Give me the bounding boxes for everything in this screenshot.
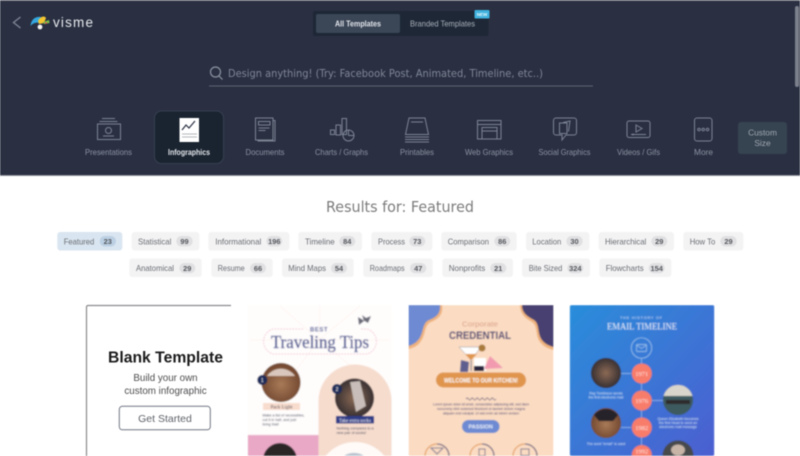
chip: flowcharts: 154 (651, 264, 664, 273)
chip: anatomical: 29 (183, 264, 191, 273)
caption 2 (657, 417, 699, 429)
card: corporate credential: Corporate (462, 320, 498, 328)
chip: how to: 29 (724, 237, 733, 246)
chip: featured (57, 232, 122, 250)
chip: process: Process (378, 236, 405, 246)
year 1976: 1976 (635, 398, 649, 405)
category: more: More (694, 147, 713, 157)
chip: hierarchical: 29 (655, 237, 663, 246)
filter chips row 1 (57, 232, 743, 250)
chip: informational: 196 (268, 237, 280, 246)
template tabs: Branded Templates (410, 18, 475, 28)
get started button: Get Started (138, 413, 192, 425)
caption 2: Queen Elizabeth becomes (657, 417, 699, 421)
logo: visme (30, 15, 93, 30)
chip: flowcharts (599, 258, 671, 277)
card: corporate credential: CREDENTIAL (449, 330, 511, 342)
category: web graphics (465, 120, 513, 157)
photo 4 (662, 440, 694, 456)
chip: nonprofits: 21 (494, 264, 502, 273)
new badge (474, 10, 490, 18)
tip 1 badge (257, 375, 267, 385)
chip: statistical: 99 (180, 237, 189, 246)
chip: resume: Resume (218, 263, 245, 273)
template tabs: All Templates (335, 18, 381, 28)
icon ring 2 (470, 444, 494, 456)
chip: mind maps: 54 (335, 264, 344, 273)
custom size button: Size (754, 138, 771, 148)
year 1982: 1982 (635, 425, 648, 432)
category: presentations: Presentations (85, 147, 132, 157)
card: blank template (86, 306, 231, 456)
caption 2: the first Head to send an (659, 421, 697, 425)
plane icon (358, 315, 371, 325)
chip: roadmaps (363, 258, 433, 277)
timeline axis (621, 358, 667, 456)
chip: timeline: 84 (343, 237, 352, 246)
chip: roadmaps: Roadmaps (370, 263, 405, 273)
card: email timeline: THE HISTORY OF (620, 316, 663, 320)
chip: bite sized (522, 258, 590, 277)
chip: anatomical: Anatomical (136, 263, 174, 273)
caption 2: electronic mail message (659, 425, 697, 429)
tip 2 photo highlight (350, 381, 366, 412)
card: traveling tips: Traveling Tips (271, 332, 369, 352)
chip: location (526, 232, 589, 250)
chip: resume (211, 258, 273, 277)
chip: mind maps (282, 258, 354, 277)
category: web graphics: Web Graphics (465, 147, 513, 157)
tip 2 label (336, 416, 374, 424)
chip: featured: Featured (64, 236, 95, 246)
chip: nonprofits (442, 258, 513, 277)
photo 3 (591, 408, 621, 438)
chip: hierarchical (599, 232, 674, 250)
chip: how to (683, 232, 743, 250)
chip: informational (208, 232, 289, 250)
category: social graphics: Social Graphics (538, 147, 590, 157)
logo: visme: visme (53, 15, 93, 30)
filter chips row 2 (129, 258, 671, 277)
chip: mind maps: Mind Maps (288, 263, 326, 273)
scrollbar (795, 6, 799, 87)
category: infographics selected (154, 111, 224, 164)
tip 1 label (263, 403, 300, 411)
tip 1 text: cut it in half, and just (262, 418, 296, 422)
chip: process (371, 232, 432, 250)
chip: resume: 66 (254, 264, 262, 273)
get started button (119, 406, 210, 430)
tip 3 photo (264, 443, 296, 456)
navy corner blob (520, 305, 554, 350)
category: videos and gifs: Videos / Gifs (617, 147, 660, 157)
year 1992 (632, 445, 652, 456)
passion pill: PASSION (469, 425, 493, 431)
category: videos and gifs (617, 121, 660, 157)
tip 1 text (262, 414, 305, 426)
tip 1 badge: 1 (261, 378, 264, 384)
chip: comparison: Comparison (448, 236, 489, 246)
caption 1 (589, 392, 624, 400)
back arrow (14, 17, 20, 28)
category: documents: Documents (246, 147, 284, 157)
welcome pill (436, 372, 526, 388)
dashed title frame (264, 329, 376, 354)
photo 1 (591, 358, 621, 388)
custom size button: Custom (748, 128, 777, 138)
header panel (0, 0, 800, 176)
year 1971 (632, 364, 652, 384)
passion pill (462, 420, 500, 433)
category: more (694, 118, 713, 157)
tip 1 label: Pack Light (271, 406, 293, 411)
body text: nonummy nibh euismod tincidunt ut laoreet dolore magna (437, 407, 526, 411)
card: email timeline: EMAIL TIMELINE (607, 322, 677, 332)
card: blank template: Build your own (133, 373, 198, 384)
tip 2 text (336, 426, 375, 435)
chip: bite sized: Bite Sized (529, 263, 563, 273)
card: corporate credential (408, 305, 554, 456)
card: blank template: Blank Template (108, 350, 223, 366)
tip 2 label: Take extra socks (339, 419, 371, 424)
search bar: Design anything! (Try: Facebook Post, Animated, Timeline, etc..) (228, 67, 543, 80)
chip: nonprofits: Nonprofits (449, 263, 485, 273)
icon ring 3 (513, 444, 537, 456)
envelope icon (631, 338, 652, 358)
chip: featured: 23 (104, 237, 112, 246)
chip: how to: How To (690, 236, 716, 246)
year 1992: 1992 (635, 448, 648, 456)
body text (433, 402, 529, 416)
template tabs (313, 10, 490, 36)
tip 1 photo (262, 363, 300, 402)
chip: comparison: 86 (498, 237, 506, 246)
chip: statistical: Statistical (138, 236, 171, 246)
chip: location: Location (532, 236, 562, 246)
tip 2 badge (332, 384, 342, 394)
chip: roadmaps: 47 (414, 264, 422, 273)
tip 2 text: Nothing compares to a (336, 426, 375, 430)
caption 3: The word "email" is used (587, 442, 625, 446)
chip: statistical (132, 232, 199, 250)
chip: hierarchical: Hierarchical (605, 236, 646, 246)
chip: comparison (441, 232, 517, 250)
chip: anatomical (129, 258, 202, 277)
cocktail illustration (459, 344, 503, 372)
category: infographics selected: Infographics (168, 147, 210, 157)
chip: process: 73 (413, 237, 421, 246)
chip: timeline: Timeline (305, 236, 335, 246)
year 1971: 1971 (635, 371, 648, 378)
search bar (209, 67, 593, 86)
category: documents (246, 118, 284, 157)
year 1982 (632, 418, 652, 438)
new badge: NEW (477, 12, 488, 17)
icon ring 1 (425, 444, 449, 456)
pink panel (248, 435, 318, 456)
card: blank template: custom infographic (124, 386, 207, 397)
tip 2 badge: 2 (336, 387, 339, 393)
caption 1: the first electronic mail (589, 396, 624, 400)
tip 2 photo (335, 378, 374, 418)
chip: informational: Informational (215, 236, 261, 246)
squiggle (466, 398, 496, 400)
category: printables: Printables (400, 147, 434, 157)
tip 1 text: bring that! (262, 422, 279, 426)
tip 2 text: new pair of socks! (336, 431, 366, 435)
blue corner blob (408, 305, 442, 349)
card: traveling tips: BEST (310, 328, 328, 334)
photo 2 (663, 385, 693, 415)
tip 1 text: Make a list of necessities, (262, 414, 305, 418)
results heading: Results for: Featured (326, 198, 474, 216)
chip: location: 30 (570, 237, 579, 246)
caption 1: Ray Tomlinson sends (589, 392, 623, 396)
category: charts and graphs: Charts / Graphs (315, 147, 368, 157)
welcome pill: WELCOME TO OUR KITCHEN! (444, 378, 518, 384)
body text: aliquam erat volutpat. Ut wisi enim ad minim veniam (443, 412, 519, 416)
chip: timeline (298, 232, 362, 250)
chip: flowcharts: Flowcharts (606, 263, 644, 273)
category: presentations (85, 118, 132, 157)
category: printables (400, 118, 434, 157)
category: social graphics (538, 118, 590, 157)
tip 4 photo (344, 453, 364, 456)
body text: Lorem ipsum dolor sit amet, consectetur adipiscing elit, sed diam (433, 402, 529, 406)
arch panel (318, 364, 392, 456)
year 1976 (632, 390, 652, 410)
card: traveling tips (248, 305, 392, 456)
chip: bite sized: 324 (569, 264, 582, 273)
custom size button (738, 122, 787, 154)
card: email timeline (570, 305, 714, 456)
category: charts and graphs (315, 118, 368, 157)
white circle panel (326, 442, 384, 456)
tip 1 photo highlight (267, 369, 295, 376)
